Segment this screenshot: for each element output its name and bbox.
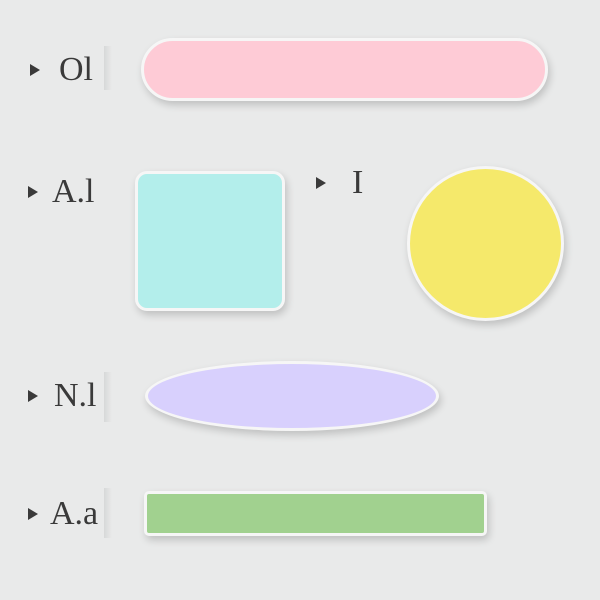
- label: A.a: [28, 488, 108, 538]
- label: A.1: A.l: [52, 173, 94, 210]
- label: I: [316, 164, 363, 201]
- label: O1: Ol: [59, 51, 93, 88]
- bar: green: [144, 491, 487, 536]
- label: N.1: [28, 372, 108, 422]
- label: N.1: N.l: [54, 377, 96, 414]
- bar: pink rounded: [141, 38, 548, 101]
- circle: yellow: [407, 166, 564, 321]
- label: O1: [30, 46, 108, 90]
- ellipse: lavender: [145, 361, 439, 431]
- label: I: I: [352, 164, 363, 201]
- label: A.1: [28, 173, 94, 210]
- label: A.a: A.a: [50, 495, 98, 532]
- square: cyan: [135, 171, 285, 311]
